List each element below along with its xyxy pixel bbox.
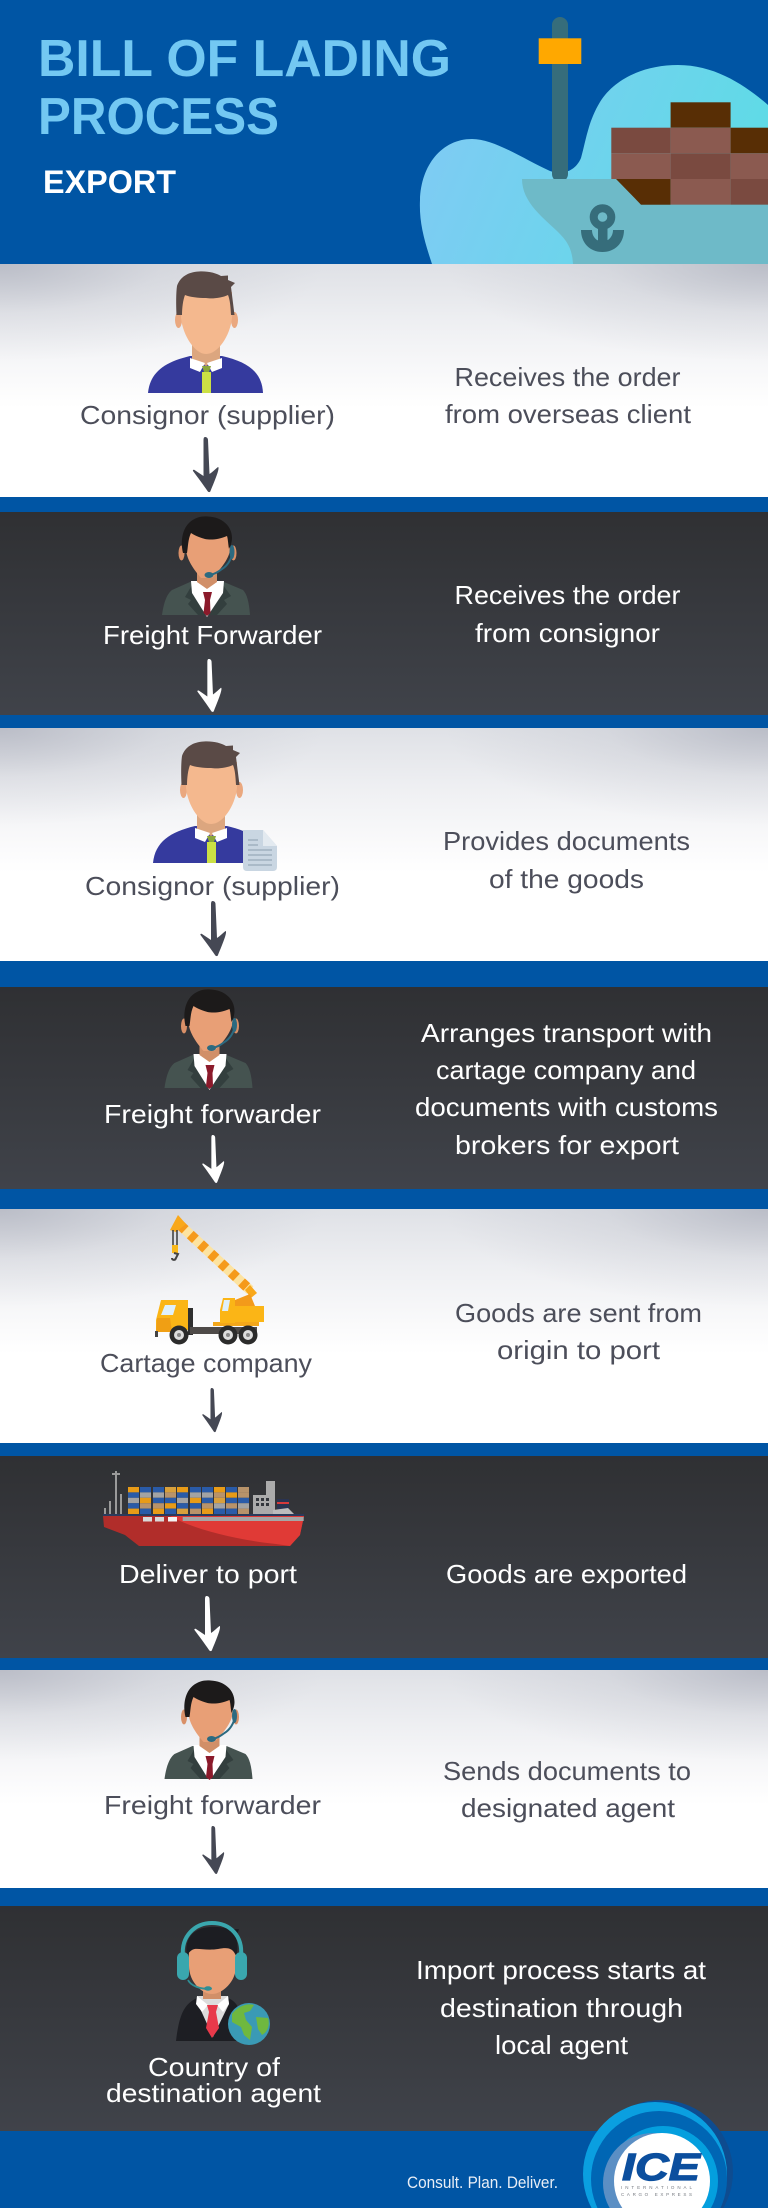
arrow [202, 1388, 222, 1432]
icon: freight forwarder [164, 1680, 252, 1781]
role label: Country of [148, 2052, 281, 2082]
description: of the goods [489, 864, 644, 894]
subtitle: EXPORT [43, 164, 176, 200]
description: brokers for export [455, 1130, 680, 1160]
description: Goods are sent from [455, 1298, 702, 1328]
role label: Consignor (supplier) [85, 871, 340, 901]
description: Arranges transport with [421, 1018, 712, 1048]
panel: freight forwarder arranges transport [0, 987, 768, 1189]
description [416, 1955, 707, 2060]
description [455, 1298, 702, 1365]
description [415, 1018, 718, 1160]
description [454, 580, 681, 648]
title: PROCESS [38, 88, 279, 146]
description: Receives the order [454, 362, 681, 392]
tagline: Consult. Plan. Deliver. [407, 2173, 558, 2192]
icon: consignor with document [153, 741, 277, 871]
logo: ICE International Cargo Express: CARGO EXPRESS [621, 2192, 692, 2197]
logo: ICE International Cargo Express: INTERNATIONAL [621, 2185, 692, 2190]
role label: Freight forwarder [104, 1099, 321, 1129]
description: origin to port [497, 1335, 661, 1365]
panel background [0, 1670, 768, 1888]
description [443, 826, 690, 894]
icon: consignor [148, 271, 263, 393]
role label: destination agent [106, 2078, 322, 2108]
role label: Deliver to port [119, 1559, 298, 1589]
panel background [0, 728, 768, 961]
panel: deliver to port [0, 1456, 768, 1658]
panel background [0, 987, 768, 1189]
arrow [202, 1826, 224, 1874]
panel: cartage company [0, 1209, 768, 1443]
role label: Freight forwarder [104, 1790, 321, 1820]
icon: freight forwarder [162, 516, 250, 617]
icon: freight forwarder [164, 989, 252, 1090]
role label: Consignor (supplier) [80, 400, 335, 430]
logo: ICE International Cargo Express: ICE [622, 2147, 702, 2189]
panel background [0, 264, 768, 497]
panel: freight forwarder receives order [0, 512, 768, 715]
arrow [194, 1596, 220, 1651]
icon: agent with headset and globe [176, 1923, 270, 2045]
description: Import process starts at [416, 1955, 707, 1985]
description: cartage company and [436, 1055, 696, 1085]
arrow [197, 659, 221, 712]
icon: crane truck [155, 1215, 264, 1344]
role label [106, 2052, 322, 2108]
logo: ICE International Cargo Express [583, 2100, 733, 2208]
arrow [202, 1135, 224, 1183]
arrow [200, 901, 226, 956]
panel background [0, 1906, 768, 2131]
panel background [0, 1456, 768, 1658]
description: from overseas client [445, 399, 692, 429]
panel: consignor provides documents [0, 728, 768, 961]
panel background [0, 1209, 768, 1443]
panel: footer [407, 2100, 733, 2208]
description: Provides documents [443, 826, 690, 856]
panel background [0, 512, 768, 715]
icon: cargo ship on blue blob [420, 17, 768, 264]
panel: destination agent [0, 1906, 768, 2131]
description: designated agent [461, 1793, 676, 1823]
description: destination through [440, 1993, 683, 2023]
arrow [193, 437, 219, 492]
role label: Cartage company [100, 1348, 312, 1378]
panel: freight forwarder sends documents [0, 1670, 768, 1888]
title [38, 30, 451, 146]
panel: header [38, 17, 768, 264]
panel: consignor receives order [0, 264, 768, 497]
description: Goods are exported [446, 1559, 687, 1589]
description: local agent [495, 2030, 629, 2060]
description: Receives the order [454, 580, 681, 610]
description: from consignor [475, 618, 660, 648]
description [443, 1756, 691, 1823]
icon: container ship [103, 1471, 304, 1546]
description: documents with customs [415, 1092, 718, 1122]
description [445, 362, 692, 429]
description: Sends documents to [443, 1756, 691, 1786]
title: BILL OF LADING [38, 30, 451, 88]
role label: Freight Forwarder [103, 620, 322, 650]
